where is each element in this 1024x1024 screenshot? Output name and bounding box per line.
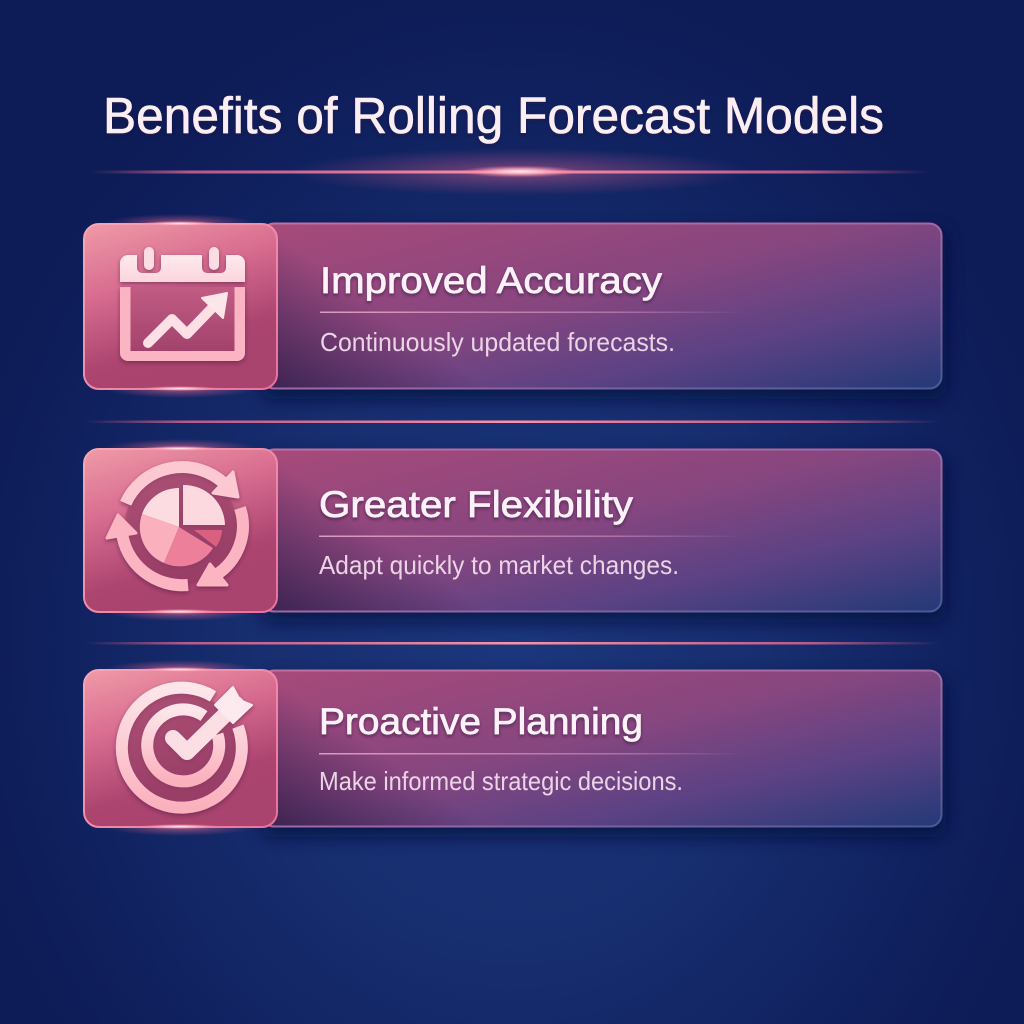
description: Make informed strategic decisions. — [319, 766, 683, 796]
heading: Proactive Planning — [319, 701, 643, 742]
title divider — [90, 148, 930, 196]
section divider 2 — [85, 642, 940, 644]
heading: Improved Accuracy — [320, 260, 663, 301]
card background 3 — [262, 670, 946, 837]
icon tile: calendar with rising arrow — [84, 214, 277, 398]
card background 2 — [262, 450, 946, 622]
title: Benefits of Rolling Forecast Models — [103, 87, 884, 144]
target icon — [122, 687, 252, 808]
section divider 1 — [85, 420, 940, 423]
cycle and pie icon — [107, 467, 243, 585]
calendar icon — [120, 247, 245, 361]
icon tile: target with check arrow — [84, 660, 277, 836]
heading: Greater Flexibility — [319, 484, 634, 525]
heading underline — [319, 753, 744, 754]
description: Continuously updated forecasts. — [320, 327, 675, 357]
panel: greater flexibility — [84, 439, 946, 622]
panel: proactive planning — [84, 660, 946, 837]
heading underline — [320, 312, 745, 313]
icon tile: cycle arrows around pie chart — [84, 439, 277, 621]
panel: improved accuracy — [84, 214, 946, 399]
description: Adapt quickly to market changes. — [319, 550, 679, 580]
heading underline — [319, 536, 744, 537]
card background 1 — [262, 224, 946, 399]
